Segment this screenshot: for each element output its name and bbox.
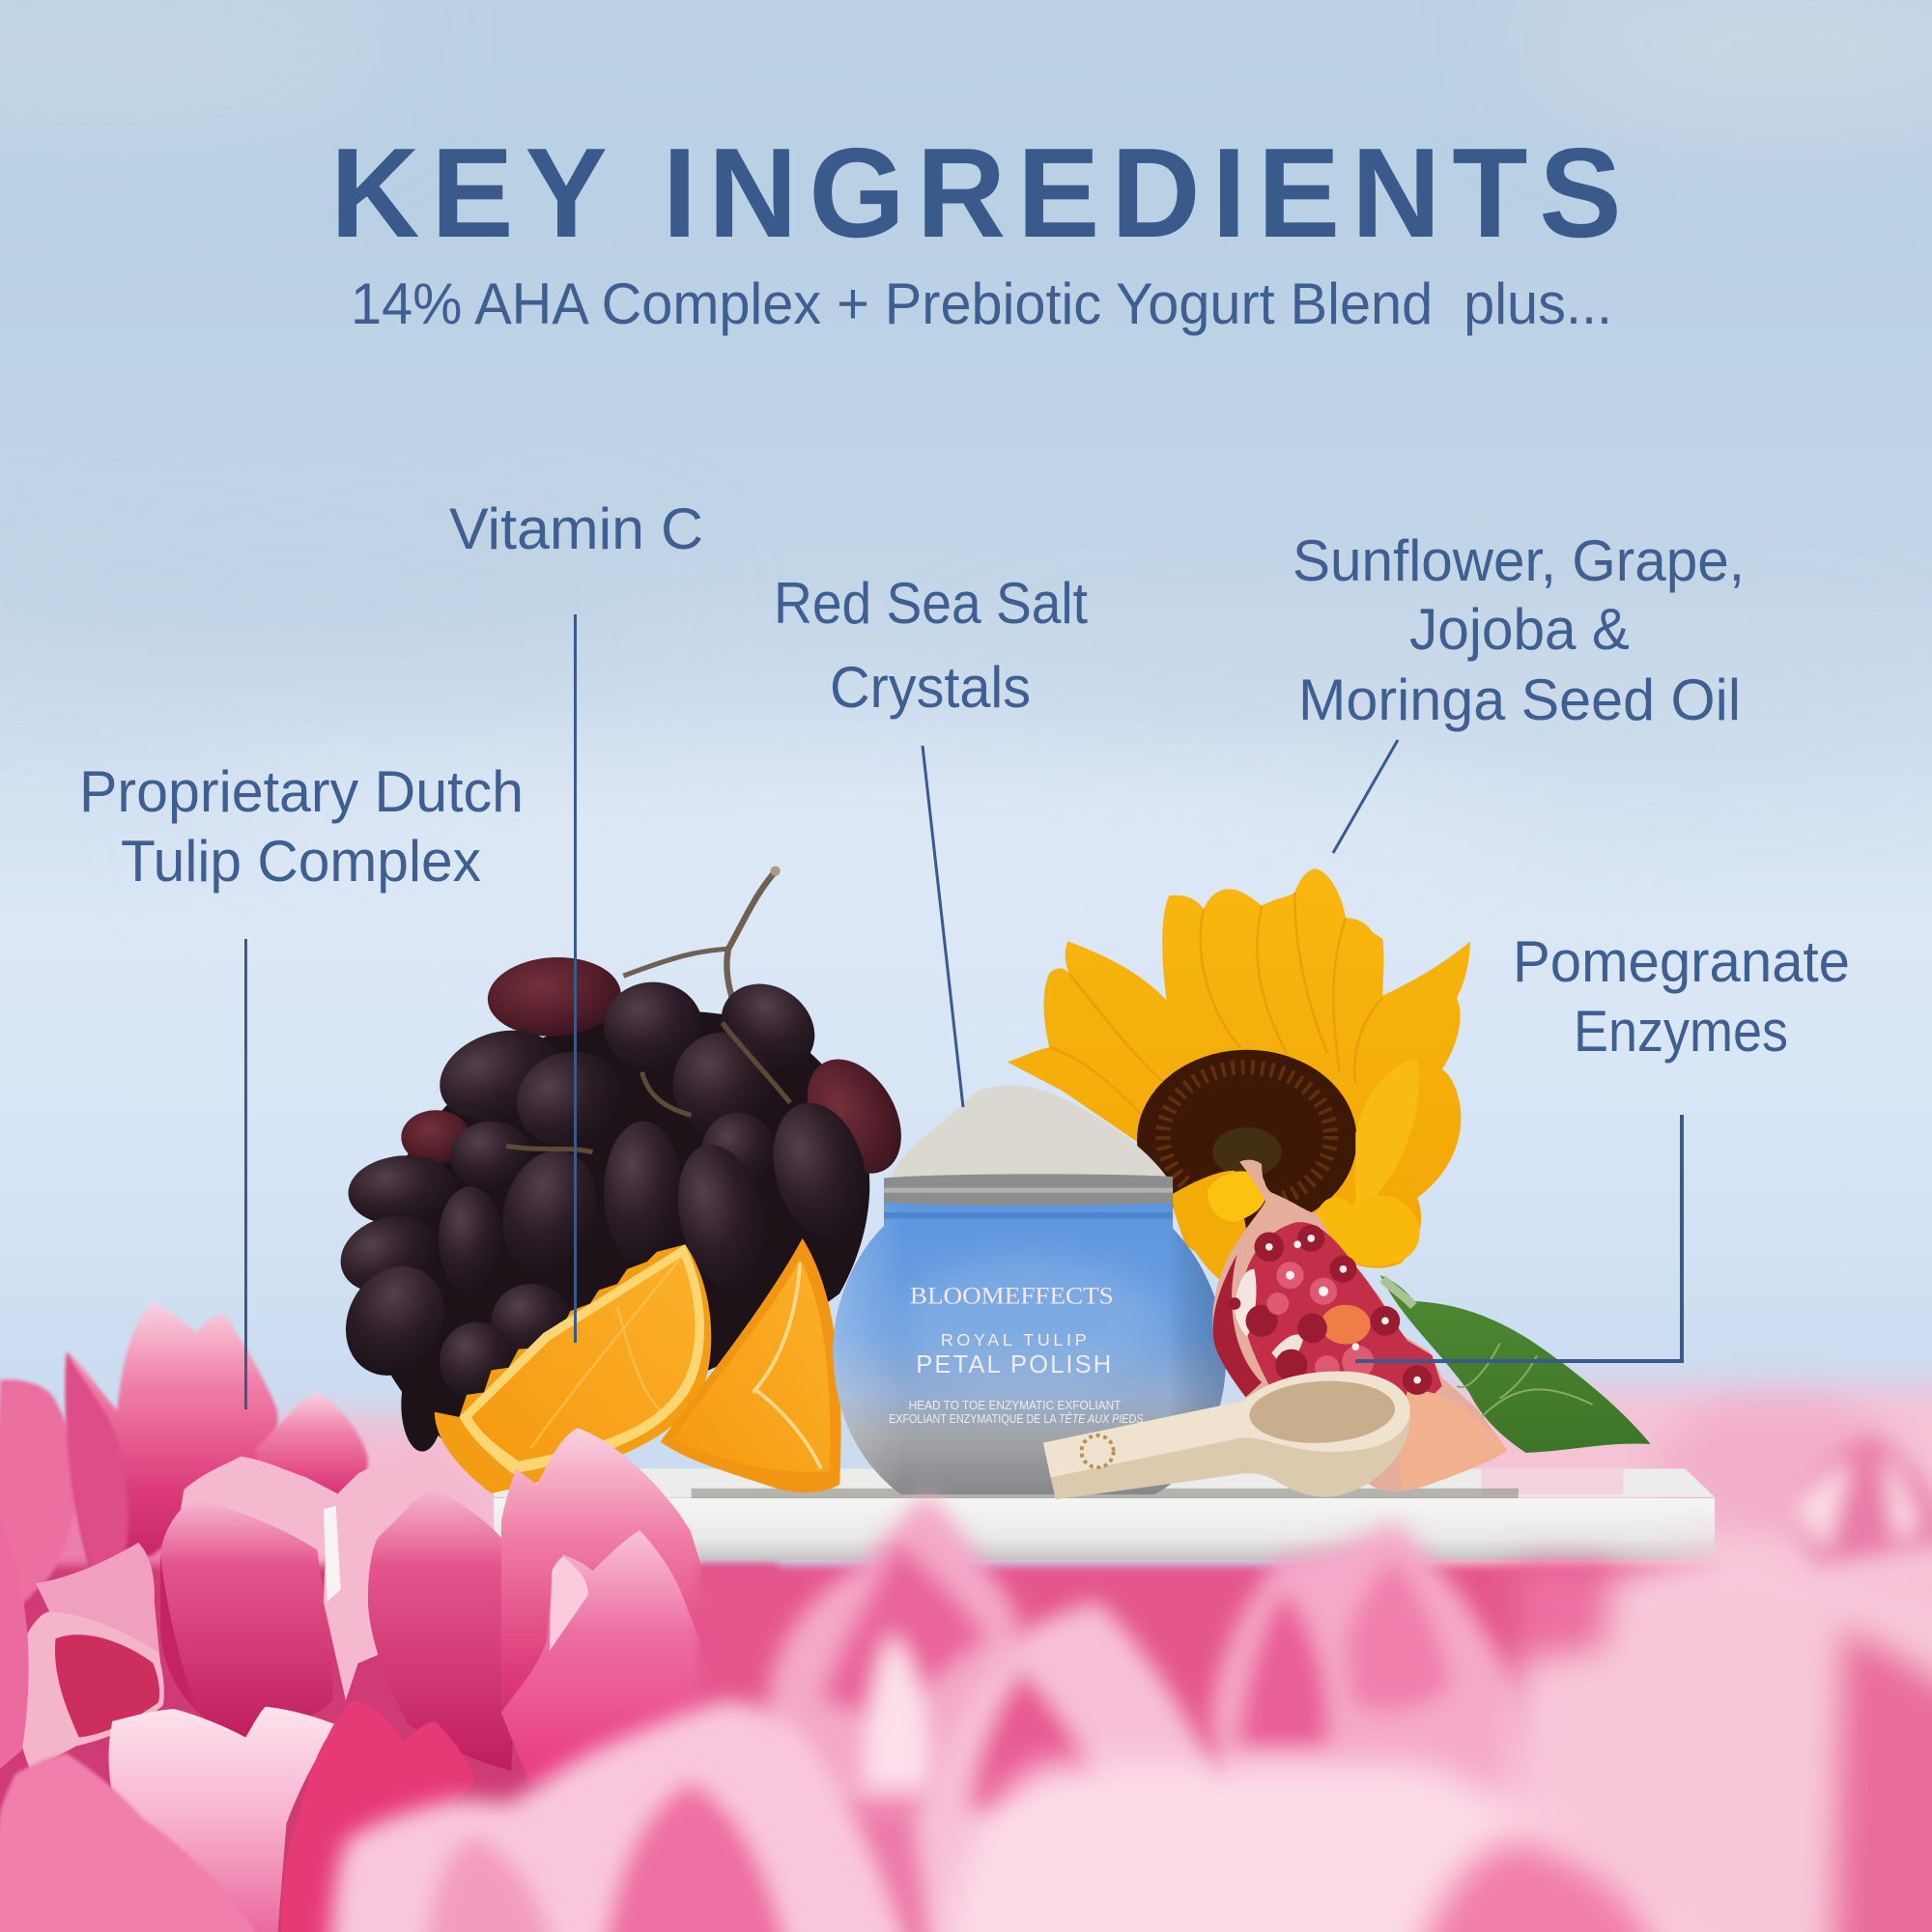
photo scene: product and ingredients on marble among tulips <box>0 867 1932 1932</box>
blurred tulip: bottom wide pale <box>945 1762 1753 1932</box>
blurred tulip: right back with pale edges <box>1790 1435 1932 1565</box>
callout: Pomegranate Enzymes: Pomegranate <box>1513 929 1850 994</box>
tulip: bottom vivid <box>281 1700 475 1932</box>
tulip: right back <box>501 1428 725 1780</box>
leaf <box>1380 1275 1651 1453</box>
tulip: bottom left <box>0 1753 256 1932</box>
callout: Pomegranate Enzymes: Enzymes <box>1574 999 1788 1064</box>
orange wedges <box>435 1238 841 1493</box>
callout: Red Sea Salt Crystals: Red Sea Salt <box>774 571 1088 636</box>
blurred tulip: centre <box>914 1602 1235 1932</box>
jar of petal polish <box>833 1085 1226 1494</box>
callout: Sunflower, Grape, Jojoba and Moringa Seed Oil: Sunflower, Grape, <box>1293 528 1745 593</box>
callout: Red Sea Salt Crystals: Crystals <box>830 655 1031 720</box>
blurred tulip: centre right <box>1209 1521 1531 1824</box>
callout: Pomegranate Enzymes <box>1355 929 1850 1361</box>
callout: Sunflower, Grape, Jojoba and Moringa Seed Oil: Moringa Seed Oil <box>1298 668 1741 732</box>
callout: Sunflower, Grape, Jojoba and Moringa Seed Oil <box>1293 528 1745 853</box>
orange wedge: left <box>435 1244 711 1493</box>
blurred background fill under slab <box>697 1565 1722 1811</box>
title: KEY INGREDIENTS <box>330 121 1622 264</box>
callout: Vitamin C: Vitamin C <box>449 497 703 561</box>
callout: Proprietary Dutch Tulip Complex: Tulip Complex <box>121 829 481 894</box>
dark pink gaps behind left tulips <box>0 1565 778 1932</box>
callout: Proprietary Dutch Tulip Complex: Proprietary Dutch <box>79 759 524 824</box>
sunflower petals <box>1008 868 1470 1282</box>
jar label text: PETAL POLISH <box>916 1351 1111 1378</box>
wooden spoon <box>1043 1372 1410 1499</box>
sunflower lower curled petals <box>1171 1060 1420 1282</box>
tulip: central <box>160 1457 337 1740</box>
blurred tulip: right <box>1482 1540 1932 1932</box>
tulip: back left edge <box>0 1379 78 1638</box>
exfoliant powder <box>892 1085 1167 1177</box>
orange wedge: right <box>661 1238 841 1492</box>
callout: Sunflower, Grape, Jojoba and Moringa Seed Oil: Jojoba & <box>1409 597 1630 662</box>
jar label text <box>889 1282 1144 1426</box>
tulip: tall back <box>66 1302 278 1575</box>
callout: Red Sea Salt Crystals <box>774 571 1088 1107</box>
tulip: right front <box>501 1530 731 1786</box>
blurred tulip: bottom left-centre <box>327 1700 925 1932</box>
blurred tulip: centre left <box>765 1493 1024 1811</box>
distant blurred tulip field <box>0 1386 1932 1932</box>
sharp tulips at left <box>0 1302 782 1932</box>
jar body <box>833 1202 1226 1494</box>
pomegranate arils <box>1241 1222 1442 1410</box>
tulip: small back right <box>256 1392 368 1528</box>
callout: Proprietary Dutch Tulip Complex <box>79 759 524 1409</box>
tulip: dark gap by shelf <box>716 1583 782 1713</box>
blurred foreground tulips <box>327 1435 1932 1932</box>
tulip: bottom pale <box>108 1707 337 1932</box>
jar label text: BLOOMEFFECTS <box>910 1282 1114 1309</box>
subtitle: 14% AHA Complex + Prebiotic Yogurt Blend plus... <box>351 271 1612 336</box>
jar label text: EXFOLIANT ENZYMATIQUE DE LA TÊTE AUX PIEDS <box>889 1411 1144 1426</box>
tulip: lower left small <box>0 1516 164 1775</box>
marble slab <box>494 1468 1715 1560</box>
tulip: deep pink <box>324 1452 513 1771</box>
pomegranate <box>1212 1160 1507 1492</box>
sunflower <box>1008 868 1470 1282</box>
jar label text: HEAD TO TOE ENZYMATIC EXFOLIANT <box>909 1398 1122 1412</box>
jar label text: ROYAL TULIP <box>941 1330 1087 1350</box>
sunflower disc <box>1137 1050 1357 1230</box>
jar glass rim <box>884 1174 1173 1206</box>
grape bunch <box>327 867 921 1452</box>
pomegranate skin <box>1212 1160 1507 1492</box>
